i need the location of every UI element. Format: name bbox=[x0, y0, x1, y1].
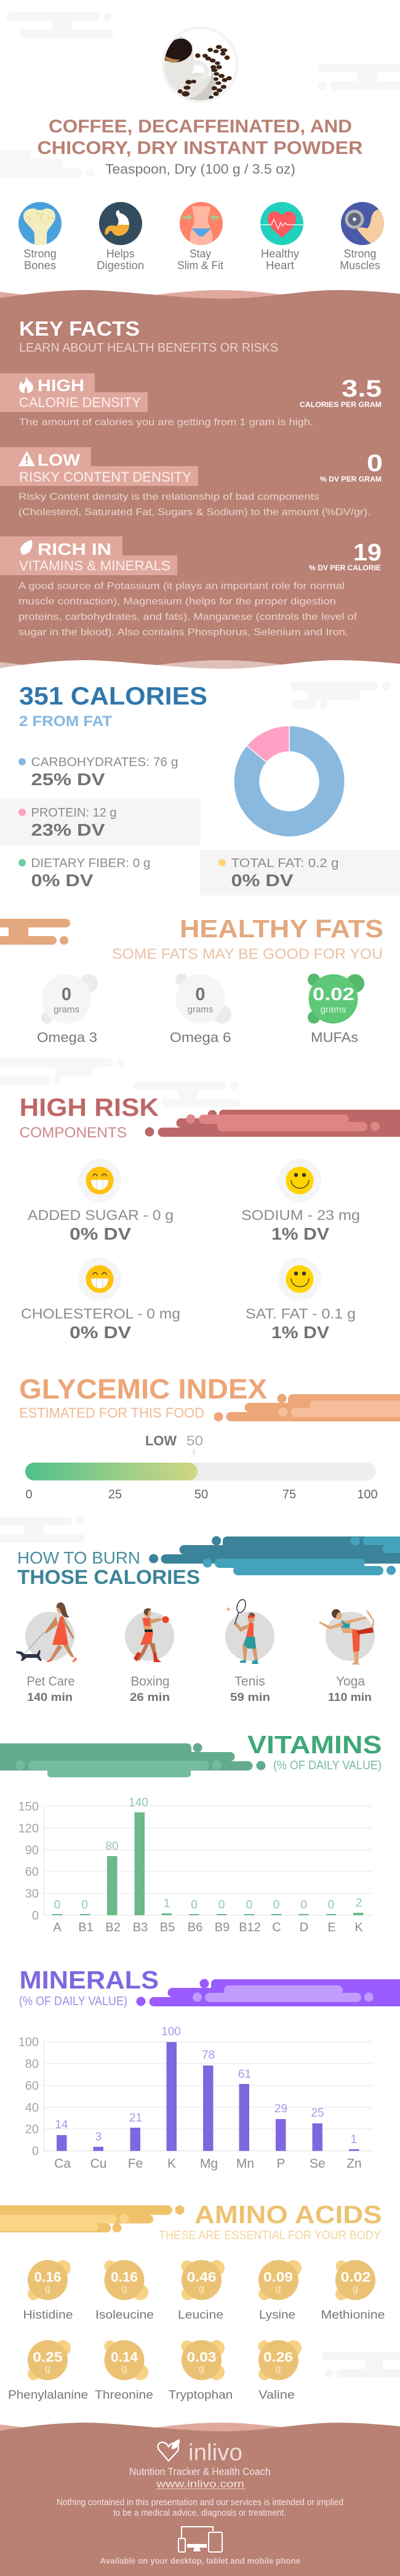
amino: valine: 0.26 bbox=[263, 2349, 293, 2365]
logo: inlivo: inlivo bbox=[188, 2440, 242, 2466]
fact: rich in vitamins and minerals: 19 bbox=[353, 539, 382, 566]
bar chart: vitamins: 150 bbox=[18, 1800, 39, 1814]
benefit: healthy heart bbox=[260, 202, 303, 272]
heading: calories: 351 CALORIES bbox=[19, 682, 207, 710]
fat: omega 3 bbox=[37, 974, 98, 1045]
amino: valine: g bbox=[276, 2364, 281, 2374]
fact: risky content density: Risky Content density is the relationship of bad components bbox=[18, 491, 319, 503]
amino: leucine: 0.46 bbox=[187, 2269, 217, 2285]
amino: isoleucine: 0.16 bbox=[111, 2269, 138, 2285]
amino: methionine: g bbox=[353, 2283, 358, 2294]
amino: histidine: Histidine bbox=[23, 2309, 73, 2322]
decorative band burn bbox=[149, 1536, 400, 1575]
amino: isoleucine bbox=[95, 2260, 154, 2322]
gauge: glycemic index: LOW bbox=[145, 1433, 177, 1448]
bar chart: vitamins: D bbox=[300, 1921, 308, 1934]
bar chart: vitamins: B9 bbox=[215, 1921, 230, 1934]
amino: leucine bbox=[178, 2260, 225, 2322]
gauge: glycemic index: 50 bbox=[186, 1433, 203, 1448]
fact: calorie density: 3.5 bbox=[342, 376, 382, 402]
footer text: Nothing contained in this presentation and our services is intended or implied bbox=[57, 2498, 343, 2508]
legend: total fat: 0% DV bbox=[231, 871, 294, 890]
benefit: helps digestion bbox=[97, 202, 144, 272]
risk: saturated fat bbox=[246, 1258, 356, 1342]
bar chart: minerals: 1 bbox=[351, 2133, 357, 2146]
decorative cloud calories bbox=[291, 682, 390, 709]
bar chart: vitamins: 0 bbox=[328, 1899, 334, 1912]
bar chart: minerals: 29 bbox=[274, 2102, 287, 2115]
bar chart: minerals: Mn bbox=[236, 2157, 254, 2171]
amino: methionine: Methionine bbox=[321, 2309, 385, 2322]
heading: healthy fats: HEALTHY FATS bbox=[180, 915, 383, 943]
benefit: stay slim and fit: Slim & Fit bbox=[177, 259, 223, 272]
bar chart: vitamins: 0 bbox=[32, 1909, 39, 1923]
legend: carbohydrates: 25% DV bbox=[31, 770, 105, 789]
food photo: coffee cup and beans bbox=[162, 26, 238, 103]
fat: omega 3: 0 bbox=[62, 985, 71, 1004]
bar chart: vitamins: A bbox=[53, 1921, 62, 1934]
bar chart: minerals: Se bbox=[310, 2157, 326, 2171]
risk: added sugar: 0% DV bbox=[70, 1224, 131, 1243]
heading: high risk bbox=[20, 1093, 159, 1141]
footer text: Nutrition Tracker & Health Coach bbox=[129, 2466, 271, 2477]
amino: leucine: Leucine bbox=[178, 2309, 223, 2322]
footer text bbox=[57, 2466, 343, 2518]
fact: risky content density: % DV PER GRAM bbox=[320, 475, 382, 483]
amino: tryptophan: Tryptophan bbox=[169, 2389, 233, 2402]
fat: omega 6: 0 bbox=[195, 985, 206, 1004]
fact: calorie density bbox=[0, 373, 382, 427]
bar chart: vitamins: K bbox=[354, 1921, 363, 1934]
heading: amino acids: AMINO ACIDS bbox=[194, 2200, 382, 2229]
heading: vitamins: VITAMINS bbox=[247, 1730, 382, 1759]
amino: histidine bbox=[23, 2260, 73, 2322]
amino: phenylalanine: Phenylalanine bbox=[8, 2389, 88, 2402]
heading: minerals: MINERALS bbox=[20, 1966, 159, 1994]
amino: isoleucine: g bbox=[122, 2283, 127, 2294]
amino: phenylalanine: 0.25 bbox=[33, 2349, 63, 2365]
fact: rich in vitamins and minerals bbox=[0, 536, 382, 638]
bar chart: minerals: 20 bbox=[25, 2123, 39, 2136]
legend: carbohydrates bbox=[18, 756, 178, 789]
activity: pet care bbox=[16, 1602, 77, 1703]
heading: key facts bbox=[19, 317, 278, 355]
decorative band healthy fats bbox=[0, 919, 70, 945]
risk: cholesterol: CHOLESTEROL - 0 mg bbox=[21, 1306, 180, 1322]
fact: risky content density: (Cholesterol, Saturated Fat, Sugars & Sodium) to the amount (%DV/gr). bbox=[18, 507, 370, 517]
activity: boxing: Boxing bbox=[130, 1674, 170, 1689]
bar chart: vitamins: 140 bbox=[129, 1796, 148, 1809]
fact: rich in vitamins and minerals: proteins, carbohydrates, and fats), Manganese (controls the level of bbox=[18, 612, 358, 622]
bar chart: vitamins: 80 bbox=[105, 1840, 119, 1853]
legend: dietary fiber: DIETARY FIBER: 0 g bbox=[31, 857, 150, 870]
benefit: strong muscles: Strong bbox=[343, 248, 377, 260]
bar chart: minerals: 3 bbox=[95, 2131, 102, 2144]
heading: calories: 2 FROM FAT bbox=[19, 713, 112, 730]
bar chart: vitamins: C bbox=[272, 1921, 281, 1934]
fact: rich in vitamins and minerals: RICH IN bbox=[38, 540, 111, 559]
heading: key facts: LEARN ABOUT HEALTH BENEFITS OR RISKS bbox=[19, 341, 278, 355]
title: CHICORY, DRY INSTANT POWDER bbox=[37, 138, 363, 158]
bar chart: minerals: 0 bbox=[32, 2145, 39, 2158]
bar chart: minerals: Mg bbox=[200, 2157, 218, 2171]
bar chart: minerals: 80 bbox=[25, 2057, 39, 2071]
fat: omega 6 bbox=[170, 974, 231, 1045]
activity: yoga: 110 min bbox=[328, 1691, 372, 1703]
gauge: glycemic index: 50 bbox=[194, 1488, 208, 1501]
decorative clouds high risk bbox=[0, 1058, 240, 1107]
fact: calorie density: HIGH bbox=[38, 376, 84, 395]
bar chart: vitamins: 0 bbox=[273, 1899, 279, 1912]
heading: glycemic index: ESTIMATED FOR THIS FOOD bbox=[19, 1405, 204, 1421]
decorative band glycemic index bbox=[214, 1394, 400, 1421]
decorative band amino acids bbox=[0, 2205, 185, 2232]
activity: pet care: Pet Care bbox=[27, 1674, 75, 1689]
benefit: stay slim and fit bbox=[177, 202, 223, 272]
bar chart: vitamins: E bbox=[327, 1921, 336, 1934]
bar chart: vitamins: 1 bbox=[164, 1897, 170, 1910]
fact: rich in vitamins and minerals: sugar in the blood). Also contains Phosphorus, Selenium and Iron. bbox=[18, 627, 348, 638]
decorative band vitamins bbox=[0, 1743, 266, 1777]
fact: rich in vitamins and minerals: % DV PER CALORIE bbox=[309, 563, 381, 572]
heading: minerals: (% OF DAILY VALUE) bbox=[19, 1995, 127, 2008]
heading: calories bbox=[19, 682, 207, 730]
fact: risky content density: LOW bbox=[38, 451, 81, 469]
amino: leucine: g bbox=[199, 2283, 204, 2294]
bar chart: minerals: Ca bbox=[54, 2157, 71, 2171]
bar chart: vitamins: 0 bbox=[246, 1899, 252, 1912]
heading: how to burn those calories: THOSE CALORIES bbox=[17, 1566, 200, 1588]
amino: threonine: Threonine bbox=[95, 2389, 153, 2402]
bar chart: minerals: 25 bbox=[311, 2107, 324, 2120]
benefit: strong bones: Bones bbox=[24, 259, 56, 272]
bar chart: vitamins: B1 bbox=[78, 1921, 94, 1934]
footer text: www.inlivo.com bbox=[156, 2478, 244, 2490]
decorative cloud top right bbox=[318, 64, 400, 90]
activity: pet care: 140 min bbox=[27, 1691, 73, 1703]
decorative band high risk bbox=[145, 1110, 400, 1137]
bar chart: vitamins: B12 bbox=[239, 1921, 261, 1934]
amino: lysine: Lysine bbox=[259, 2309, 295, 2322]
amino: lysine: 0.09 bbox=[263, 2269, 293, 2285]
legend: dietary fiber: 0% DV bbox=[31, 871, 94, 890]
benefit: healthy heart: Healthy bbox=[261, 248, 299, 260]
heading: minerals bbox=[19, 1966, 159, 2008]
bar chart: vitamins: 0 bbox=[300, 1899, 307, 1912]
bar chart: minerals: 78 bbox=[202, 2049, 215, 2062]
fat: mufas: grams bbox=[321, 1004, 346, 1015]
decorative cloud top left bbox=[6, 12, 113, 38]
amino: phenylalanine: g bbox=[45, 2364, 50, 2374]
bar chart: vitamins: 2 bbox=[356, 1897, 362, 1910]
activity: tennis bbox=[225, 1599, 274, 1703]
amino: lysine: g bbox=[276, 2283, 281, 2294]
risk: saturated fat: 1% DV bbox=[271, 1323, 329, 1342]
heading: healthy fats: SOME FATS MAY BE GOOD FOR YOU bbox=[112, 946, 383, 963]
gauge: glycemic index: 25 bbox=[108, 1488, 122, 1501]
donut chart: macronutrients bbox=[234, 726, 345, 836]
decorative cloud left middle bbox=[0, 150, 94, 177]
benefit: strong muscles bbox=[340, 202, 386, 272]
heading: glycemic index: GLYCEMIC INDEX bbox=[19, 1373, 267, 1405]
icon: devices bbox=[178, 2527, 222, 2552]
heading: vitamins: (% OF DAILY VALUE) bbox=[273, 1759, 382, 1772]
risk: cholesterol: 0% DV bbox=[70, 1323, 131, 1342]
fat: mufas: 0.02 bbox=[313, 985, 354, 1004]
amino: tryptophan: g bbox=[199, 2364, 204, 2374]
benefit: healthy heart: Heart bbox=[266, 259, 294, 272]
activity: boxing: 26 min bbox=[130, 1691, 170, 1703]
amino: isoleucine: Isoleucine bbox=[95, 2309, 154, 2322]
subtitle: Teaspoon, Dry (100 g / 3.5 oz) bbox=[105, 161, 295, 177]
risk: sodium: 1% DV bbox=[271, 1224, 329, 1243]
bar chart: vitamins: 0 bbox=[218, 1899, 225, 1912]
decorative band minerals bbox=[137, 1979, 400, 2006]
bar chart: minerals: 61 bbox=[238, 2068, 251, 2081]
legend: carbohydrates: CARBOHYDRATES: 76 g bbox=[31, 756, 178, 769]
footer text: to be a medical advice, diagnosis or treatment. bbox=[113, 2508, 286, 2518]
bar chart: minerals: P bbox=[276, 2157, 286, 2171]
bar chart: vitamins: B2 bbox=[105, 1921, 121, 1934]
decorative cloud burn bbox=[0, 1517, 85, 1543]
bar chart: minerals: K bbox=[167, 2157, 176, 2171]
fat: mufas: MUFAs bbox=[311, 1030, 358, 1045]
amino: valine: Valine bbox=[258, 2389, 295, 2402]
fat: omega 3: Omega 3 bbox=[37, 1030, 97, 1045]
bar chart: vitamins: 0 bbox=[191, 1899, 198, 1912]
title: COFFEE, DECAFFEINATED, AND bbox=[49, 116, 352, 137]
bar chart: minerals: Zn bbox=[346, 2157, 362, 2171]
benefit: helps digestion: Digestion bbox=[97, 259, 144, 272]
legend: protein bbox=[0, 799, 201, 845]
risk: sodium: SODIUM - 23 mg bbox=[241, 1207, 360, 1223]
fact: calorie density: CALORIES PER GRAM bbox=[300, 400, 382, 409]
amino: lysine bbox=[258, 2260, 302, 2322]
bar chart: minerals: 100 bbox=[18, 2036, 39, 2049]
fact: rich in vitamins and minerals: A good source of Potassium (it plays an important role for normal bbox=[18, 581, 345, 591]
activity: yoga: Yoga bbox=[336, 1674, 365, 1689]
bar chart: vitamins: 0 bbox=[54, 1899, 60, 1912]
bar chart: minerals: 40 bbox=[25, 2101, 39, 2115]
bar chart: vitamins: B3 bbox=[133, 1921, 148, 1934]
legend: dietary fiber bbox=[18, 857, 150, 890]
amino: methionine: 0.02 bbox=[341, 2269, 370, 2285]
bar chart: minerals: Cu bbox=[90, 2157, 106, 2171]
bar chart: minerals bbox=[18, 2025, 372, 2171]
amino: methionine bbox=[321, 2260, 385, 2322]
bar chart: minerals: 100 bbox=[161, 2025, 181, 2038]
panel: key facts bbox=[0, 290, 400, 677]
heading: high risk: COMPONENTS bbox=[20, 1124, 127, 1141]
bar chart: vitamins: B5 bbox=[160, 1921, 175, 1934]
amino: histidine: 0.16 bbox=[34, 2269, 62, 2285]
gauge: glycemic index: 0 bbox=[25, 1488, 33, 1501]
heading: amino acids bbox=[159, 2200, 382, 2242]
fact: calorie density: CALORIE DENSITY bbox=[19, 395, 141, 410]
fat: omega 6: Omega 6 bbox=[170, 1030, 231, 1045]
bar chart: vitamins: 120 bbox=[18, 1822, 39, 1835]
fact: risky content density: RISKY CONTENT DENSITY bbox=[19, 469, 191, 485]
bar chart: vitamins: 90 bbox=[25, 1844, 39, 1857]
fact: rich in vitamins and minerals: muscle contraction), Magnesium (helps for the proper digestion bbox=[18, 596, 336, 607]
bar chart: vitamins: 60 bbox=[25, 1865, 39, 1879]
heading: glycemic index bbox=[19, 1373, 267, 1421]
fact: rich in vitamins and minerals: VITAMINS & MINERALS bbox=[19, 558, 170, 573]
wave divider below key facts bbox=[0, 660, 400, 680]
activity: tennis: 59 min bbox=[230, 1691, 270, 1703]
benefit: strong muscles: Muscles bbox=[340, 259, 380, 272]
legend: protein: 23% DV bbox=[31, 820, 105, 839]
bar chart: minerals: Fe bbox=[128, 2157, 143, 2171]
risk: saturated fat: SAT. FAT - 0.1 g bbox=[246, 1306, 356, 1322]
benefit: helps digestion: Helps bbox=[106, 248, 135, 260]
risk: added sugar bbox=[28, 1159, 174, 1243]
decorative cloud amino bbox=[322, 2352, 400, 2378]
amino: threonine bbox=[95, 2340, 153, 2402]
gauge: glycemic index: 75 bbox=[282, 1488, 296, 1501]
amino: tryptophan: 0.03 bbox=[187, 2349, 217, 2365]
bar chart: vitamins: 30 bbox=[25, 1887, 39, 1900]
title bbox=[37, 116, 363, 158]
bar chart: minerals: 21 bbox=[129, 2112, 142, 2125]
amino: valine bbox=[258, 2340, 302, 2402]
fat: mufas bbox=[308, 974, 364, 1045]
legend: total fat bbox=[200, 850, 400, 895]
activity: tennis: Tenis bbox=[234, 1674, 265, 1689]
gauge: glycemic index: 100 bbox=[357, 1488, 378, 1501]
fact: calorie density: The amount of calories you are getting from 1 gram is high. bbox=[19, 418, 313, 427]
bar chart: vitamins bbox=[18, 1796, 372, 1934]
footer panel bbox=[0, 2423, 400, 2576]
amino: phenylalanine bbox=[8, 2340, 88, 2402]
heading: healthy fats bbox=[112, 915, 383, 963]
amino: tryptophan bbox=[169, 2340, 233, 2402]
heading: how to burn those calories: HOW TO BURN bbox=[17, 1548, 140, 1567]
heading: how to burn those calories bbox=[17, 1548, 200, 1588]
availability note: Available on your desktop, tablet and mobile phone bbox=[100, 2556, 300, 2566]
bar chart: minerals: 14 bbox=[55, 2118, 68, 2131]
risk: sodium bbox=[241, 1159, 360, 1243]
heading: amino acids: THESE ARE ESSENTIAL FOR YOUR BODY bbox=[159, 2229, 381, 2242]
activity: boxing bbox=[125, 1609, 174, 1703]
benefit: strong bones bbox=[18, 202, 62, 272]
logo: inlivo bbox=[158, 2439, 242, 2466]
benefit: stay slim and fit: Stay bbox=[190, 248, 211, 260]
fat: omega 3: grams bbox=[54, 1004, 79, 1015]
amino: histidine: g bbox=[45, 2283, 50, 2294]
fact: risky content density bbox=[0, 447, 383, 517]
legend: total fat: TOTAL FAT: 0.2 g bbox=[231, 857, 338, 870]
bar chart: minerals: 60 bbox=[25, 2080, 39, 2093]
activity: yoga bbox=[319, 1609, 375, 1703]
heading: vitamins bbox=[247, 1730, 382, 1772]
benefit: strong bones: Strong bbox=[23, 248, 57, 260]
risk: added sugar: ADDED SUGAR - 0 g bbox=[28, 1207, 174, 1223]
risk: cholesterol bbox=[21, 1258, 180, 1342]
legend: protein: PROTEIN: 12 g bbox=[31, 806, 117, 820]
amino: threonine: 0.14 bbox=[111, 2349, 138, 2365]
bar chart: vitamins: 0 bbox=[81, 1899, 88, 1912]
gauge: glycemic index bbox=[25, 1433, 378, 1501]
fact: risky content density: 0 bbox=[367, 450, 383, 477]
bar chart: vitamins: B6 bbox=[188, 1921, 202, 1934]
amino: threonine: g bbox=[122, 2364, 127, 2374]
fat: omega 6: grams bbox=[188, 1004, 213, 1015]
heading: key facts: KEY FACTS bbox=[19, 317, 140, 340]
heading: high risk: HIGH RISK bbox=[20, 1093, 159, 1121]
